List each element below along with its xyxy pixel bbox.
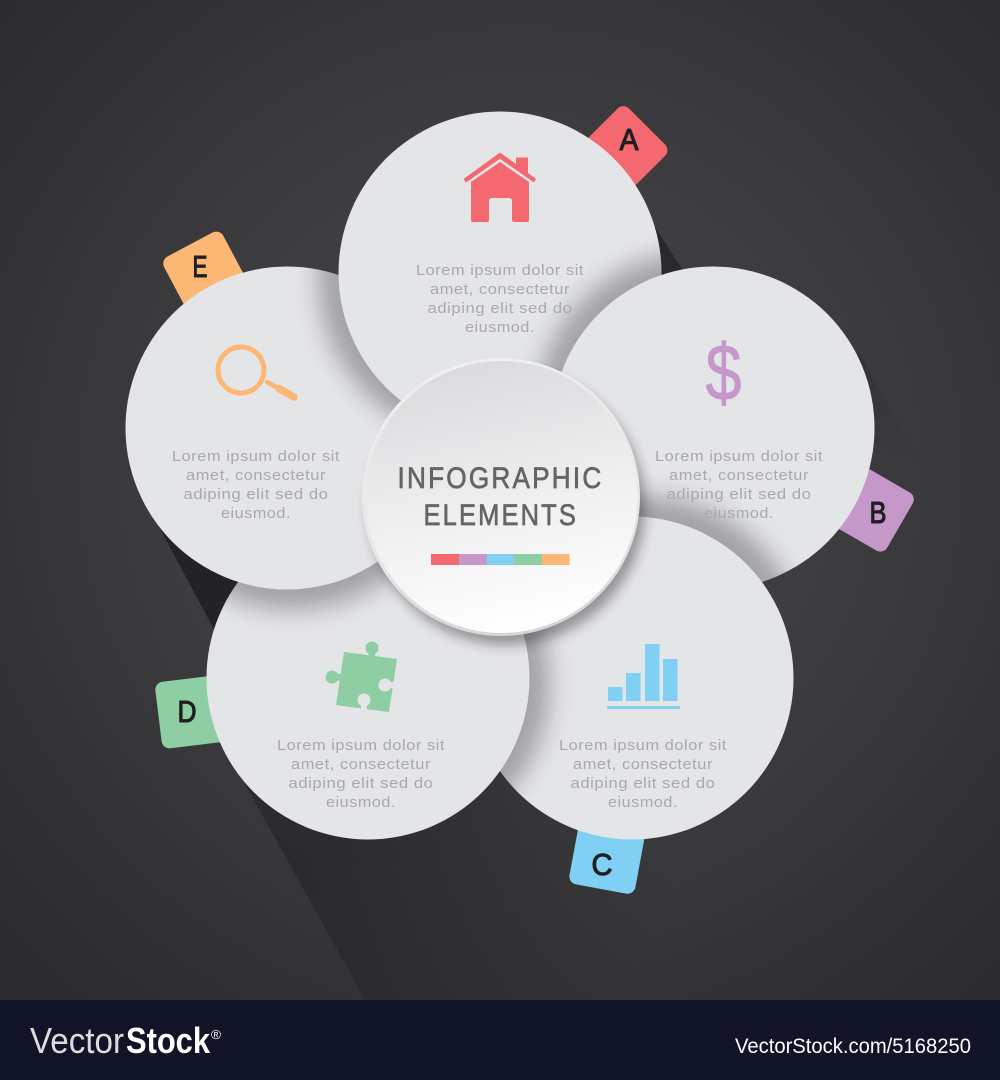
shadow of B on A <box>530 243 662 372</box>
footer image id: VectorStock.com/5168250 <box>735 1035 971 1058</box>
text block D <box>277 738 445 811</box>
shadow of D on C <box>500 628 564 796</box>
letter D: D <box>178 694 196 729</box>
central circle shadow <box>369 369 645 645</box>
text block D: eiusmod. <box>326 795 396 811</box>
footer logo <box>30 1020 221 1061</box>
text block B: eiusmod. <box>704 506 774 522</box>
text block E: adiping elit sed do <box>184 487 328 503</box>
footer logo: Stock <box>126 1020 211 1061</box>
central circle <box>362 358 640 636</box>
icon: dollar: $ <box>706 328 742 417</box>
text block D: amet, consectetur <box>291 757 431 773</box>
text block C: adiping elit sed do <box>570 776 716 792</box>
text block C <box>559 738 727 811</box>
circle A <box>338 112 662 434</box>
icon: house <box>464 152 536 222</box>
tab A <box>574 103 671 200</box>
text block C: eiusmod. <box>608 795 678 811</box>
text block B: amet, consectetur <box>669 468 809 484</box>
shadow of A on E <box>304 268 401 424</box>
footer logo: ® <box>211 1027 221 1042</box>
letter B: B <box>870 495 886 530</box>
icon: puzzle piece <box>326 642 398 714</box>
text block E <box>172 449 340 522</box>
tab B <box>823 461 917 555</box>
title: INFOGRAPHIC <box>398 462 604 495</box>
circle C <box>470 516 794 840</box>
tab C <box>568 814 647 895</box>
overlap of circle A above E <box>338 274 439 400</box>
text block A: adiping elit sed do <box>428 301 572 317</box>
text block D: Lorem ipsum dolor sit <box>277 738 445 754</box>
title: ELEMENTS <box>424 499 578 532</box>
text block E: eiusmod. <box>221 506 291 522</box>
circle E <box>126 266 448 590</box>
text block E: Lorem ipsum dolor sit <box>172 449 340 465</box>
text block A: eiusmod. <box>465 320 535 336</box>
long shadows on background <box>158 222 928 1000</box>
text block D: adiping elit sed do <box>288 776 434 792</box>
text block A: Lorem ipsum dolor sit <box>416 263 584 279</box>
letter E: E <box>192 249 208 284</box>
text block C: amet, consectetur <box>573 757 713 773</box>
shadow of C on B <box>638 482 794 582</box>
circle B <box>552 266 874 590</box>
circle D <box>206 516 530 840</box>
text block E: amet, consectetur <box>186 468 326 484</box>
letter A: A <box>620 122 639 157</box>
tab E <box>160 229 252 322</box>
letter C: C <box>592 847 612 882</box>
footer band <box>0 1000 1000 1080</box>
icon: magnifier <box>218 347 294 397</box>
text block C: Lorem ipsum dolor sit <box>559 738 727 754</box>
text block B: Lorem ipsum dolor sit <box>655 449 823 465</box>
tab D <box>154 674 232 749</box>
footer logo: Vector <box>30 1020 124 1061</box>
text block A: amet, consectetur <box>430 282 570 298</box>
text block B: adiping elit sed do <box>666 487 812 503</box>
title <box>398 462 604 532</box>
icon: bar chart <box>607 644 680 709</box>
colour bar <box>431 554 570 565</box>
text block A <box>416 263 584 336</box>
shadow of E on D <box>222 562 395 624</box>
text block B <box>655 449 823 522</box>
